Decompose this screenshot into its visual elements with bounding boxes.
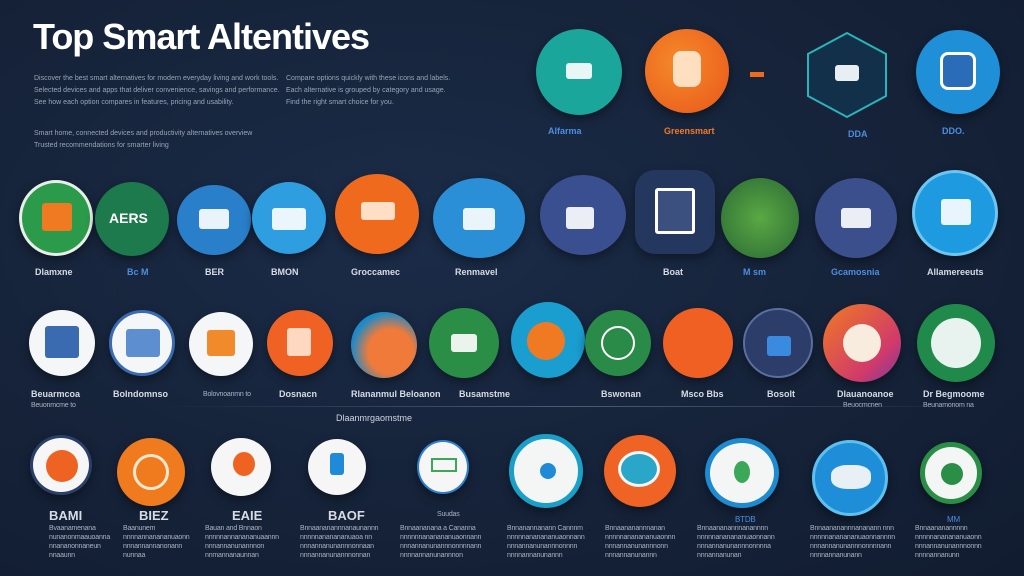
row 2 icons (17, 170, 1000, 277)
row 4 icons: Bnnaananannnananann nnn (810, 525, 894, 532)
row 4 icons: nnnnnananananuaonn (915, 534, 981, 541)
row 3 icons: Bolndomnso (113, 389, 168, 399)
icon: teal (536, 29, 622, 115)
row 3 icons: Dlauanoanoe (837, 389, 894, 399)
icon: orange (645, 29, 729, 113)
row 3 icons: Beuonmcme to (31, 402, 76, 409)
intro text: Trusted recommendations for smarter living (34, 142, 169, 149)
row 2 icons: BER (205, 267, 224, 277)
row 4 icons: nnnannanunannnonnnna (697, 543, 771, 550)
intro text: Each alternative is grouped by category and usage. (286, 87, 446, 94)
row 4 icons: nnnnannanananuaonn (123, 534, 189, 541)
row 4 icons: nnnannanunannnonnnnann (810, 543, 891, 550)
row 1 icons: Greensmart (664, 126, 715, 136)
row 4 icons: nunnaa (123, 552, 145, 559)
icon: blue (916, 30, 1000, 114)
row 3 icons: Beuarmcoa (31, 389, 80, 399)
row 3 icons: Rlananmul Beloanon (351, 389, 441, 399)
intro text: Selected devices and apps that deliver convenience, savings and performance. (34, 87, 280, 94)
row 3 icons: Dosnacn (279, 389, 317, 399)
row 4 icons: nnnnannanunann (810, 552, 862, 559)
row 3 icons: Busamstme (459, 389, 510, 399)
row 3 icons: Bswonan (601, 389, 641, 399)
icon: hexagon (807, 32, 887, 118)
row 4 icons: nnnannanunannnonnan (300, 552, 370, 559)
row 2 icons: Boat (663, 267, 683, 277)
text columns row 4 (49, 525, 110, 559)
row 4 icons: Suudas (437, 511, 460, 518)
row 4 icons: nnnnnananananuaonnann (697, 534, 775, 541)
row 3 icons: Msco Bbs (681, 389, 724, 399)
row 4 icons: nnnnnnananananuaonnann (400, 534, 481, 541)
row 2 icons: Groccamec (351, 267, 400, 277)
row 4 icons: nnnannanunannnonnaan (300, 543, 374, 550)
row 3 icons: Dr Begmoome (923, 389, 985, 399)
row 4 icons: nnnannanunannnonnn (915, 543, 981, 550)
row 4 icons (28, 434, 983, 559)
row 2 icons: AERS (109, 210, 148, 226)
row 4 icons: Baanunem (123, 525, 155, 532)
row 4 icons: nnnannanunannn (605, 552, 657, 559)
row 3 icons: Beunamonom na (923, 402, 974, 409)
row 2 icons: Renmavel (455, 267, 498, 277)
row 3 icons: Beuocmcnen (843, 402, 882, 409)
row 4 icons: MM (947, 515, 960, 524)
row 4 icons: nnnnnananananuaonnannnn (810, 534, 895, 541)
divider caption: Dlaanmrgaomstme (336, 413, 412, 423)
intro text: Discover the best smart alternatives for modern everyday living and work tools. (34, 75, 278, 82)
row 4 icons: nnnannanunannnonnnnann (400, 543, 481, 550)
row 4 icons: nnnannanunannnon (205, 543, 264, 550)
row 4 icons: BIEZ (139, 508, 169, 523)
text columns row 4: Bvaanamenana (49, 525, 96, 532)
row 3 icons: Bosolt (767, 389, 795, 399)
row 4 icons: Bauan and Bnnaon (205, 525, 262, 532)
row 2 icons: Dlamxne (35, 267, 73, 277)
row 1 icons: DDO. (942, 126, 964, 136)
row 4 icons: nnnnnananananuaoa nn (300, 534, 372, 541)
row 2 icons: Allamereeuts (927, 267, 984, 277)
row 4 icons: BAOF (328, 508, 365, 523)
text columns row 4: nnananonnaneun (49, 543, 101, 550)
row 4 icons: EAIE (232, 508, 262, 523)
row 4 icons: Bnnanannanann Cannnm (507, 525, 583, 532)
row 1 icons: Alfarma (548, 126, 582, 136)
intro text: See how each option compares in features, pricing and usability. (34, 99, 234, 106)
row 4 icons: Bnnaananana a Cananna (400, 525, 476, 532)
intro text: Find the right smart choice for you. (286, 99, 394, 106)
intro text (34, 74, 450, 149)
intro text: Smart home, connected devices and productivity alternatives overview (34, 130, 252, 137)
row 4 icons: Bnnaananannnanannnn (697, 525, 768, 532)
row 4 icons: nnmannanaunnan (205, 552, 259, 559)
row 4 icons: nnnannanunannnonnnn (507, 543, 577, 550)
row 4 icons: nnnannannanonann (123, 543, 182, 550)
row 1 icons (534, 29, 1002, 139)
intro text: Compare options quickly with these icons and labels. (286, 75, 450, 82)
row 4 icons: nnnnnananananuaonnann (507, 534, 585, 541)
title: Top Smart Altentives (33, 16, 369, 57)
row 2 icons: BMON (271, 267, 298, 277)
row 2 icons: Bc M (127, 267, 149, 277)
row 2 icons: Gcamosnia (831, 267, 880, 277)
text columns row 4: nunanonmaauoanna (49, 534, 110, 541)
row 4 icons: nnnnannanunn (915, 552, 959, 559)
row 4 icons: Bnnaananannnanan (605, 525, 665, 532)
row 4 icons: Bnnaananannnanaunannn (300, 525, 378, 532)
row 4 icons: nnnannanunan (697, 552, 741, 559)
row 2 icons: M sm (743, 267, 766, 277)
row 3 icons (28, 302, 996, 409)
row 4 icons: nnnnannanunannnon (400, 552, 463, 559)
row 4 icons: BAMI (49, 508, 82, 523)
text columns row 4: nnaaunn (49, 552, 75, 559)
row 1 icons: DDA (848, 129, 868, 139)
row 3 icons: Bolovnoanmn to (203, 391, 251, 398)
row 4 icons: nnnnannanunannn (507, 552, 562, 559)
row 4 icons: nnnannanunannnonn (605, 543, 668, 550)
row 4 icons: nnnnnananananuaonnn (605, 534, 675, 541)
row 4 icons: Bnnaananannnnn (915, 525, 967, 532)
row 4 icons: BTDB (735, 515, 756, 524)
row 4 icons: nnnnnannanananuaannn (205, 534, 279, 541)
